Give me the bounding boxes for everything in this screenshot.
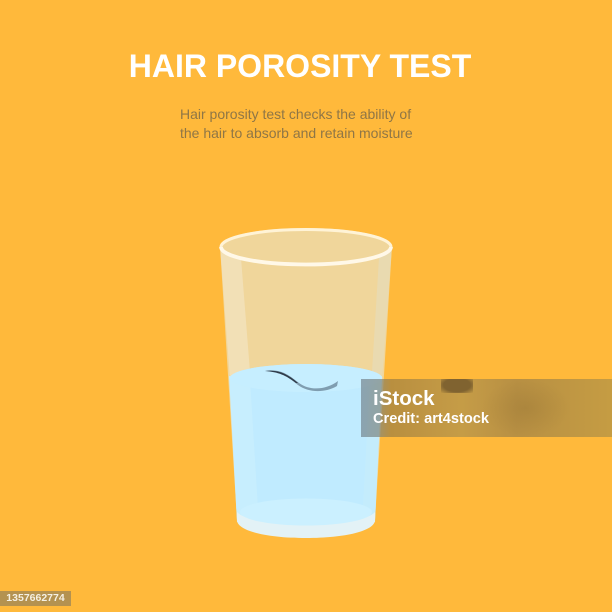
image id: 1357662774 xyxy=(6,592,65,604)
watermark xyxy=(361,379,612,437)
hair strand xyxy=(265,370,338,391)
watermark credit: Credit: art4stock xyxy=(373,411,489,427)
water xyxy=(229,364,382,538)
hair strand dark end xyxy=(265,371,298,383)
title: HAIR POROSITY TEST xyxy=(129,48,471,84)
glass body xyxy=(220,228,392,537)
watermark dark blob xyxy=(441,377,473,393)
watermark logo: iStock xyxy=(373,387,435,410)
watermark soft shade xyxy=(481,379,571,437)
subtitle text: the hair to absorb and retain moisture xyxy=(180,125,413,141)
glass rim xyxy=(221,230,391,264)
subtitle text xyxy=(180,106,413,141)
image id xyxy=(0,591,71,606)
subtitle text: Hair porosity test checks the ability of xyxy=(180,106,411,122)
